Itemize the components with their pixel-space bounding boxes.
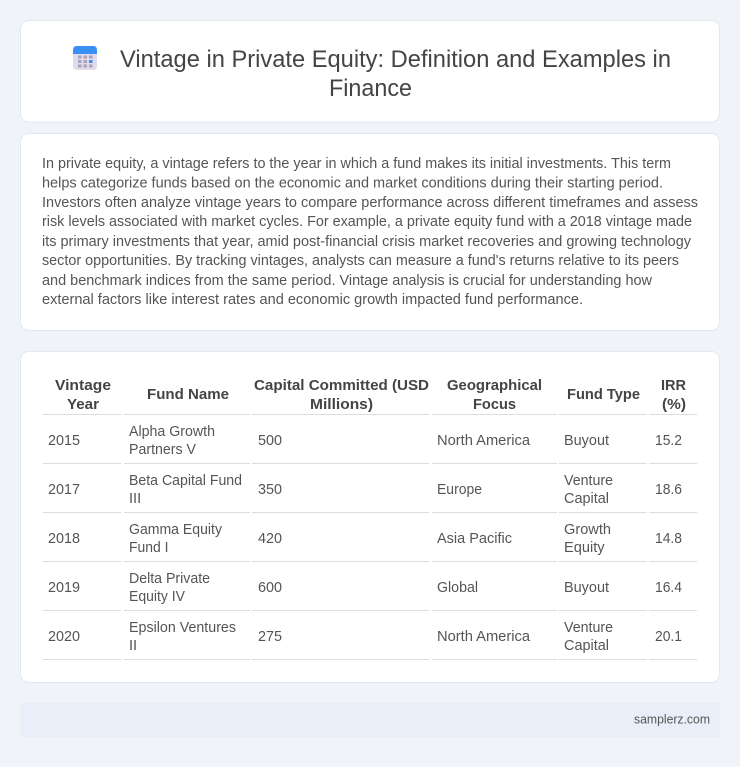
table header row: (%) — [662, 396, 686, 413]
table row 2018: 2018 — [48, 531, 80, 547]
table row 2018: Fund I — [129, 540, 168, 556]
table row 2017: 2017 — [48, 482, 80, 498]
title text: Vintage in Private Equity: Definition and Examples in — [120, 46, 671, 73]
table row 2018: 420 — [258, 531, 282, 547]
table row 2020: Venture — [564, 620, 613, 636]
table header row: Capital Committed (USD — [254, 377, 429, 394]
panel: definition paragraph: helps categorize funds based on the economic and market conditions during their starting period. — [42, 176, 663, 192]
table row 2015 — [48, 424, 682, 458]
panel: definition paragraph: external factors like interest rates and economic growth impacted fund performance. — [42, 292, 583, 308]
table row 2020: Epsilon Ventures — [129, 620, 236, 636]
table header row: Focus — [473, 396, 516, 413]
table row 2019: Buyout — [564, 580, 609, 596]
title text: Finance — [329, 75, 412, 102]
table row 2017 — [48, 473, 682, 507]
table row 2019: Delta Private — [129, 571, 210, 587]
table row 2017: III — [129, 491, 141, 507]
table row 2018: Asia Pacific — [437, 531, 512, 547]
table row 2015: 500 — [258, 433, 282, 449]
table row 2019 — [48, 571, 682, 605]
panel: definition paragraph — [20, 134, 720, 330]
table row 2018: Equity — [564, 540, 605, 556]
table row 2017: 350 — [258, 482, 282, 498]
table header row: IRR — [661, 377, 686, 394]
table header row: Vintage — [55, 377, 111, 394]
table row 2020: II — [129, 638, 137, 654]
table header row: Fund Name — [147, 386, 229, 403]
footer bar — [20, 703, 720, 737]
panel: definition paragraph: Investors often analyze vintage years to compare performance across different timeframes and assess — [42, 195, 698, 211]
table row 2020: Capital — [564, 638, 609, 654]
title text — [120, 46, 671, 102]
icon: calendar — [73, 46, 97, 70]
table row 2017: Beta Capital Fund — [129, 473, 242, 489]
panel: definition paragraph: its primary investments that year, amid post-financial crisis market recoveries and growing technology — [42, 234, 692, 250]
table row 2019: 2019 — [48, 580, 80, 596]
table row 2015: 2015 — [48, 433, 80, 449]
table row 2018: Gamma Equity — [129, 522, 223, 538]
footer bar: samplerz.com — [634, 712, 710, 726]
table row 2019: 16.4 — [655, 580, 682, 596]
table row 2015: Partners V — [129, 442, 196, 458]
table row 2015: North America — [437, 433, 531, 449]
table header row: Geographical — [447, 377, 542, 394]
table row 2020 — [48, 620, 682, 654]
table row 2018: Growth — [564, 522, 611, 538]
table row 2017: Europe — [437, 482, 482, 498]
panel: fund table — [20, 352, 720, 682]
table row 2019: 600 — [258, 580, 282, 596]
table row 2020: 275 — [258, 629, 282, 645]
panel: definition paragraph: and benchmark indices from the same period. Vintage analysis is crucial for understanding how — [42, 273, 653, 289]
table row 2020: 20.1 — [655, 629, 682, 645]
table header row: Year — [67, 396, 99, 413]
table row 2019: Global — [437, 580, 478, 596]
table row 2017: 18.6 — [655, 482, 682, 498]
panel: definition paragraph: sector opportunities. By tracking vintages, analysts can measure a fund's returns relative to its peers — [42, 253, 679, 269]
table header row — [55, 377, 686, 413]
table row 2015: Buyout — [564, 433, 609, 449]
table header row: Fund Type — [567, 386, 640, 403]
table row 2020: North America — [437, 629, 531, 645]
table row 2015: 15.2 — [655, 433, 682, 449]
table row 2018 — [48, 522, 682, 556]
panel: definition paragraph: risk levels associated with market cycles. For example, a private equity fund with a 2018 vintage made — [42, 214, 692, 230]
table row 2019: Equity IV — [129, 589, 185, 605]
table row 2020: 2020 — [48, 629, 80, 645]
table row 2017: Capital — [564, 491, 609, 507]
panel: definition paragraph: In private equity, a vintage refers to the year in which a fund makes its initial investments. This term — [42, 156, 671, 172]
panel: title header — [20, 20, 720, 122]
table row 2018: 14.8 — [655, 531, 682, 547]
table row 2017: Venture — [564, 473, 613, 489]
table row 2015: Alpha Growth — [129, 424, 215, 440]
table header row: Millions) — [310, 396, 373, 413]
